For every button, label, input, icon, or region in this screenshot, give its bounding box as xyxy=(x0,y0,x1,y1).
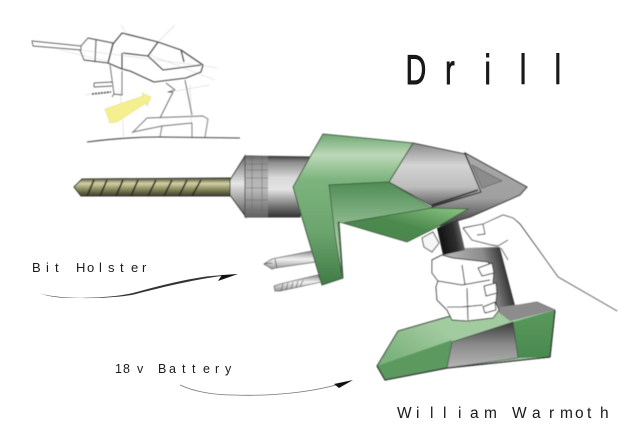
arrow: 18v battery xyxy=(180,380,353,395)
drill illustration xyxy=(74,134,617,380)
label: bit holster: Bit Holster xyxy=(32,260,147,275)
lower green wing xyxy=(343,208,468,242)
hand: thumb and wrist xyxy=(463,215,617,311)
label: 18v battery: 18v Battery xyxy=(115,362,232,376)
arrow: bit holster xyxy=(38,274,238,298)
fingernails xyxy=(478,263,497,313)
green shell xyxy=(293,134,413,285)
nose casing xyxy=(432,153,527,226)
grey window panel xyxy=(389,143,481,206)
green inner panel xyxy=(329,182,432,276)
sketch: ground line xyxy=(87,137,240,142)
fist xyxy=(432,255,499,321)
sketch: holstered bits xyxy=(94,82,112,87)
sketch: concept drawing of the drill xyxy=(32,25,240,142)
battery xyxy=(377,302,555,380)
sketch: bit shaft xyxy=(32,41,81,50)
title: Drill xyxy=(406,45,561,93)
icon: yellow arrow xyxy=(105,93,151,123)
drill bit xyxy=(74,178,230,196)
sketch: battery xyxy=(132,116,208,137)
sketch: holster arms xyxy=(110,65,122,97)
handle lower section xyxy=(443,247,515,320)
sketch: handle xyxy=(160,80,192,118)
holstered bits xyxy=(264,251,321,291)
sketch construction lines xyxy=(60,25,218,140)
sketch: main body xyxy=(108,33,203,82)
chuck xyxy=(230,156,312,217)
nose inner window xyxy=(472,165,502,188)
author credit: William Warmoth xyxy=(397,405,609,422)
handle upper dark section xyxy=(437,220,465,255)
sketch: chuck xyxy=(80,38,113,63)
hand: index finger behind handle xyxy=(422,232,439,252)
